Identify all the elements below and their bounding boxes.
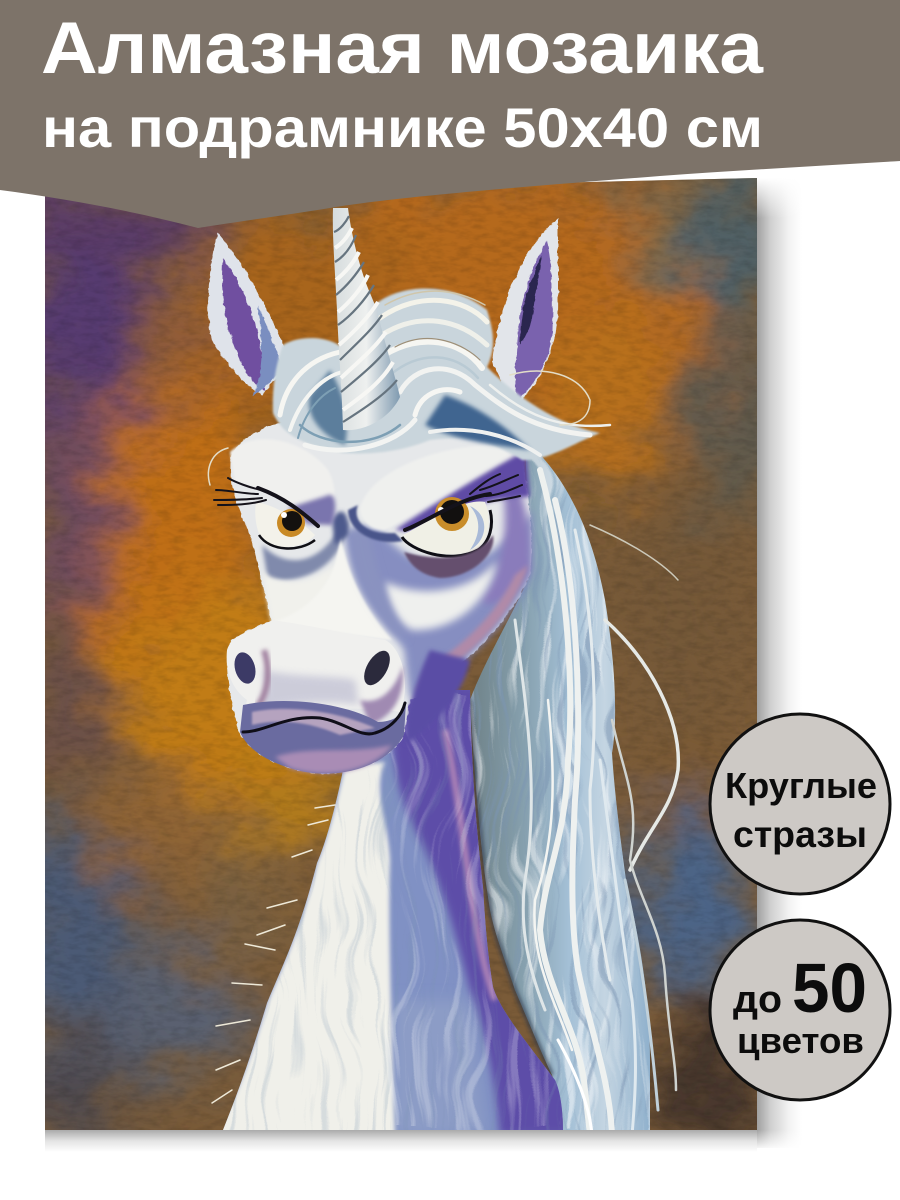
neck fur tufts xyxy=(212,805,335,1103)
right eye xyxy=(402,497,493,578)
heading line 1: Алмазная мозаика xyxy=(41,8,765,89)
mane behind the neck xyxy=(460,430,678,1140)
brows xyxy=(230,439,530,542)
left eye xyxy=(255,502,315,548)
eyelashes xyxy=(214,474,522,530)
unicorn horn xyxy=(333,208,400,430)
face shading xyxy=(262,470,532,745)
painting on canvas xyxy=(45,178,757,1130)
badge: up to 50 colours xyxy=(710,920,890,1100)
badge: up to 50 colours: до xyxy=(733,979,782,1021)
loose strands xyxy=(590,525,678,1110)
badge: up to 50 colours: цветов xyxy=(737,1020,864,1061)
badge: up to 50 colours: 50 xyxy=(792,949,867,1027)
badge: round rhinestones: Круглые xyxy=(725,765,877,806)
painted background xyxy=(45,178,757,1130)
unicorn ears xyxy=(208,218,558,408)
loose forelock hairs xyxy=(208,371,590,485)
muzzle xyxy=(227,620,405,730)
badge: round rhinestones xyxy=(710,714,890,894)
forelock mane xyxy=(273,288,610,460)
mouth and lips xyxy=(240,701,406,774)
banner ribbon xyxy=(0,0,900,228)
badge: round rhinestones: стразы xyxy=(733,814,867,855)
unicorn neck xyxy=(212,685,570,1135)
canvas shadow xyxy=(45,178,803,1152)
unicorn head xyxy=(214,411,532,774)
heading line 2: на подрамнике 50х40 см xyxy=(42,96,763,159)
